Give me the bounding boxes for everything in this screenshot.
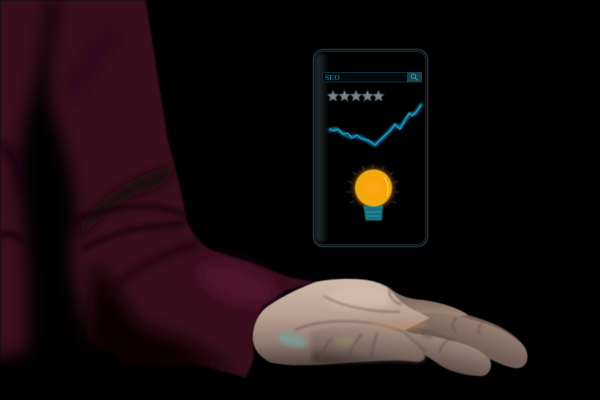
shirt: torso and sleeve (0, 0, 316, 400)
search bar (322, 72, 422, 82)
bulb rays (347, 164, 399, 203)
palm lines and finger creases (295, 288, 482, 361)
lower shadow (0, 335, 262, 400)
star rating (327, 90, 384, 101)
sleeve folds (80, 165, 173, 238)
central dark torso fold (20, 0, 95, 400)
finger: back (388, 288, 468, 320)
bulb halo (353, 168, 394, 208)
trend line chart (330, 105, 421, 145)
bulb base (364, 206, 382, 220)
phone body outline (314, 50, 428, 246)
hand silhouette base (253, 279, 527, 376)
palm highlight (326, 287, 394, 309)
palm (253, 279, 430, 365)
iridescent reflection on palm (276, 330, 308, 350)
bulb glass (356, 170, 392, 206)
finger: index front shading (310, 327, 424, 363)
search button (407, 72, 422, 82)
phone left inner glow (316, 54, 329, 242)
sleeve cuff highlight (192, 253, 284, 315)
sleeve underside shadow (85, 260, 235, 370)
finger: ring (415, 313, 527, 368)
hand (253, 279, 527, 376)
icon: magnifier (411, 74, 418, 80)
holographic phone (314, 50, 428, 246)
bulb reflection (384, 177, 388, 196)
search label: SEO (325, 73, 340, 82)
lightbulb icon (347, 164, 399, 220)
finger: middle (404, 332, 491, 376)
